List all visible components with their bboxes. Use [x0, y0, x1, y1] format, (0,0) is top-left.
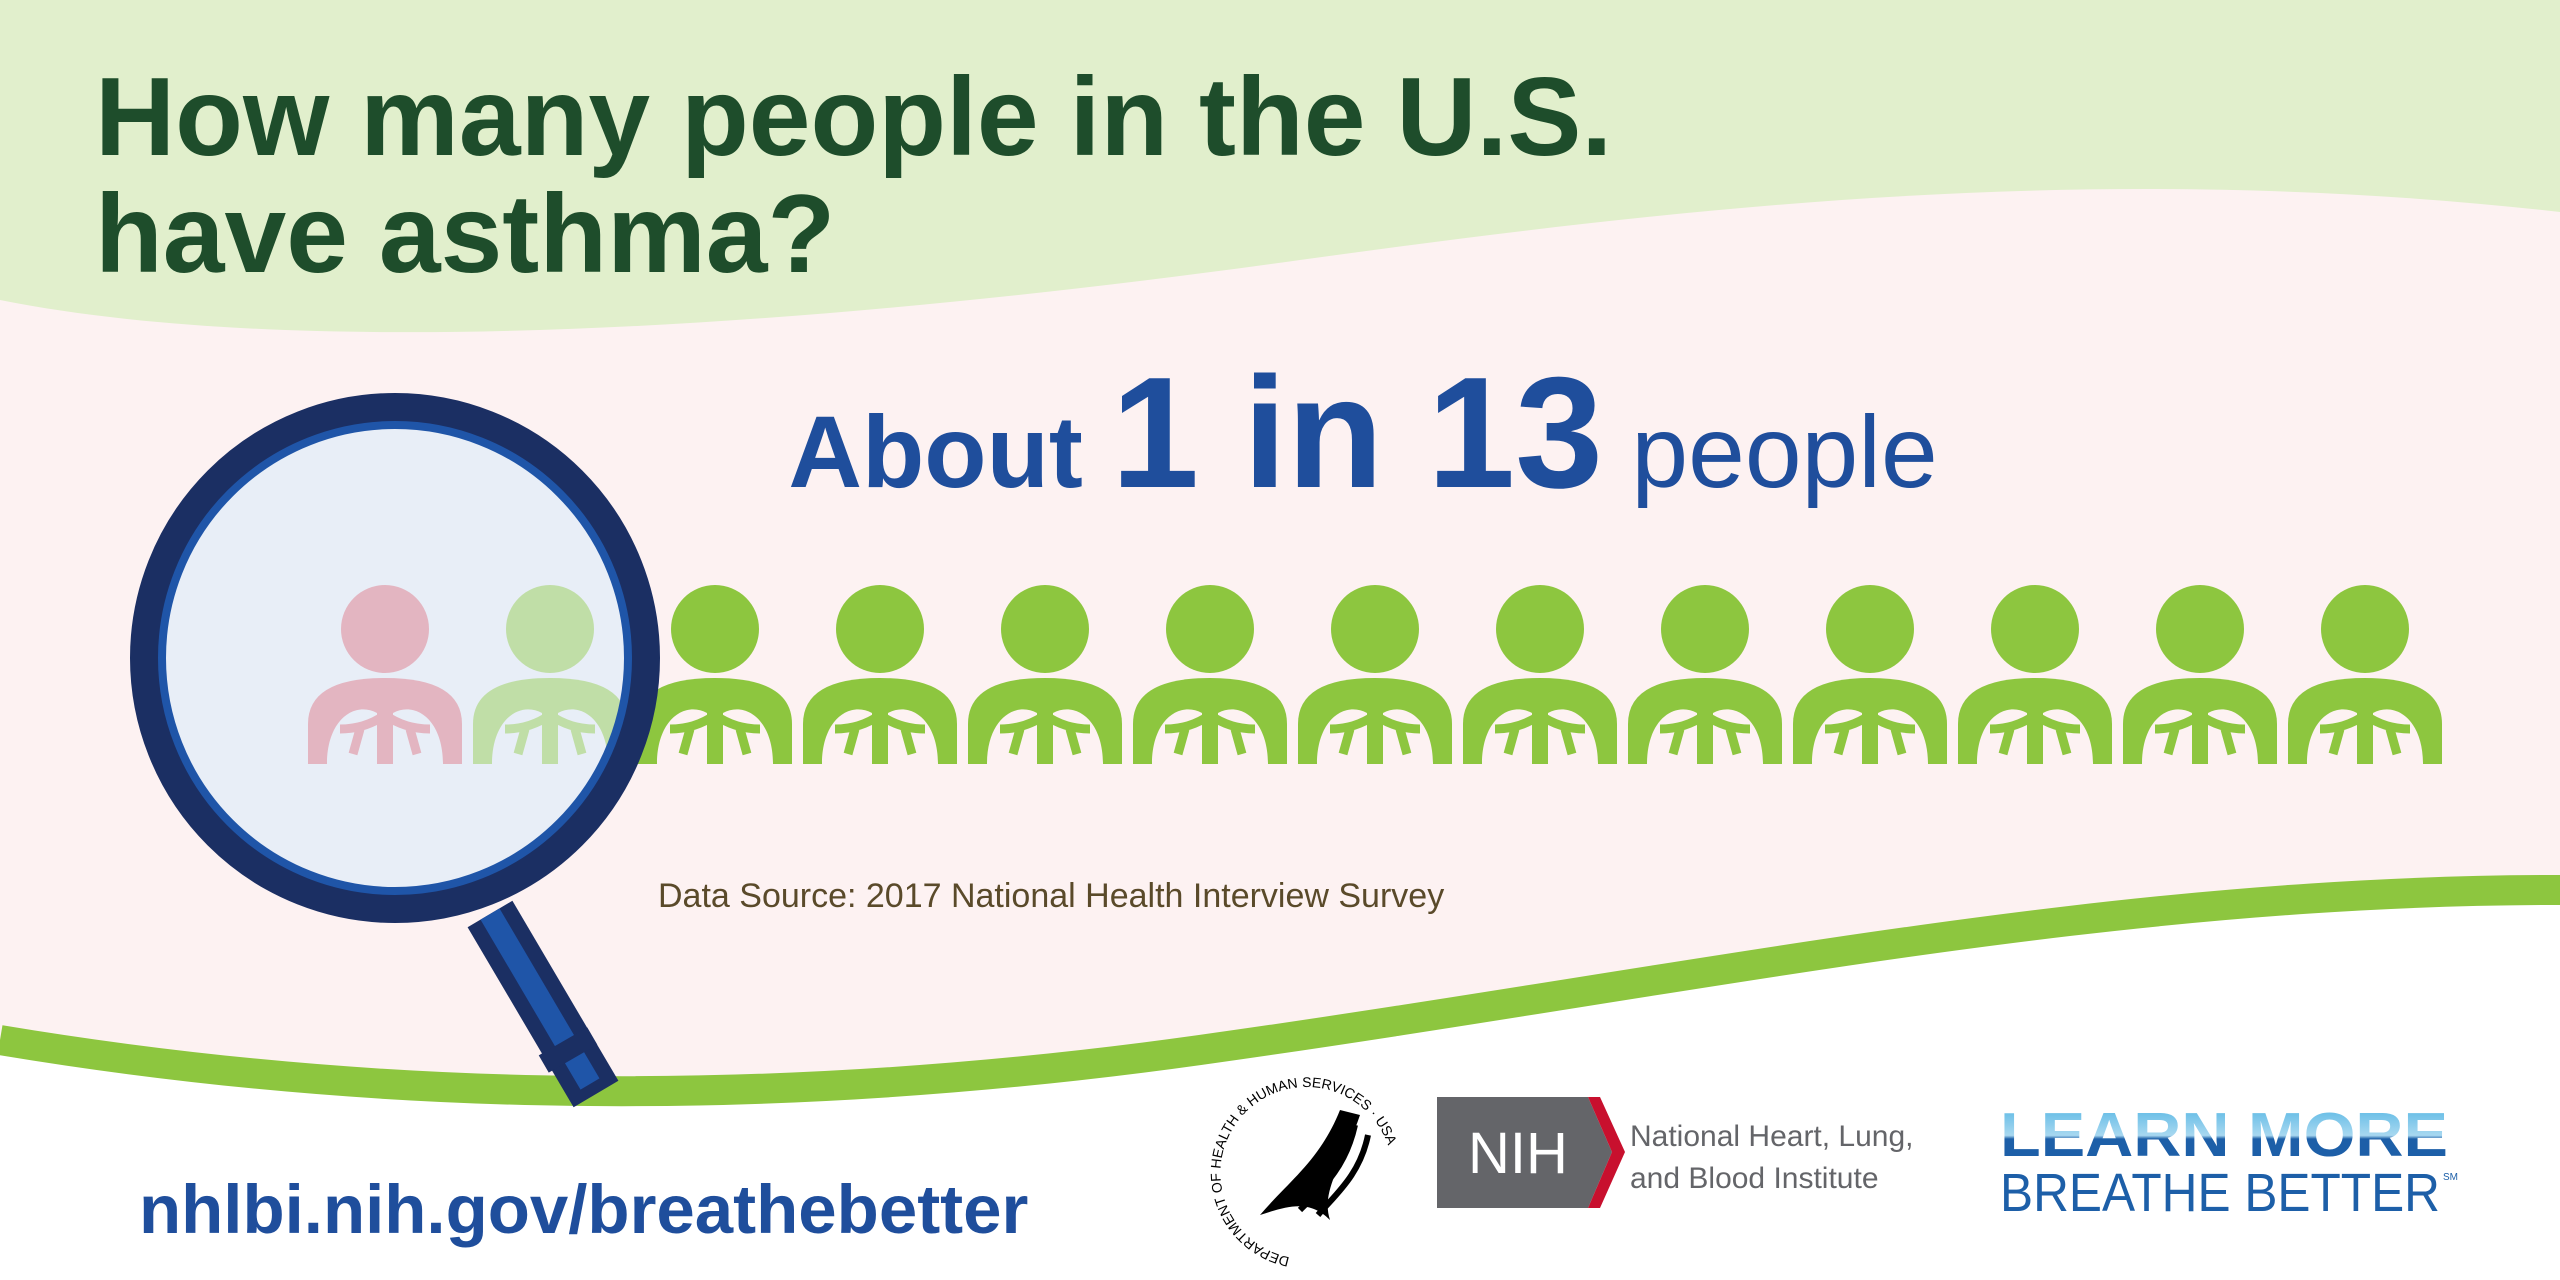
magnifier ring and handle	[145, 408, 645, 1094]
top green band	[0, 0, 2560, 332]
logo: NIH: and Blood Institute	[1630, 1162, 1879, 1195]
headline: About 1 in 13 people: About 1 in 13 people	[788, 345, 1938, 521]
magnifier glass fill	[155, 418, 635, 898]
url: nhlbi.nih.gov/breathebetter	[139, 1171, 1028, 1248]
logo: NIH: National Heart, Lung,	[1630, 1120, 1914, 1153]
logo: Learn More Breathe Better	[2000, 1101, 2458, 1223]
title: How many people in the U.S.	[95, 55, 1612, 179]
logo: NIH: NIH	[1468, 1121, 1568, 1186]
title line 2: have asthma?	[95, 172, 835, 296]
logo: Learn More Breathe Better: LEARN MORE	[2000, 1101, 2448, 1170]
logo: Learn More Breathe Better: SM	[2443, 1172, 2458, 1183]
bottom white area	[0, 890, 2560, 1280]
logo: Learn More Breathe Better: BREATHE BETTER	[2000, 1163, 2440, 1223]
logo: NIH	[1437, 1097, 1914, 1208]
people row: 13 icons	[308, 585, 2442, 764]
data source: Data Source: 2017 National Health Interview Survey	[658, 877, 1444, 915]
logo: HHS: DEPARTMENT OF HEALTH & HUMAN SERVICES · USA	[1210, 1077, 1396, 1266]
green stripe	[0, 890, 2560, 1091]
